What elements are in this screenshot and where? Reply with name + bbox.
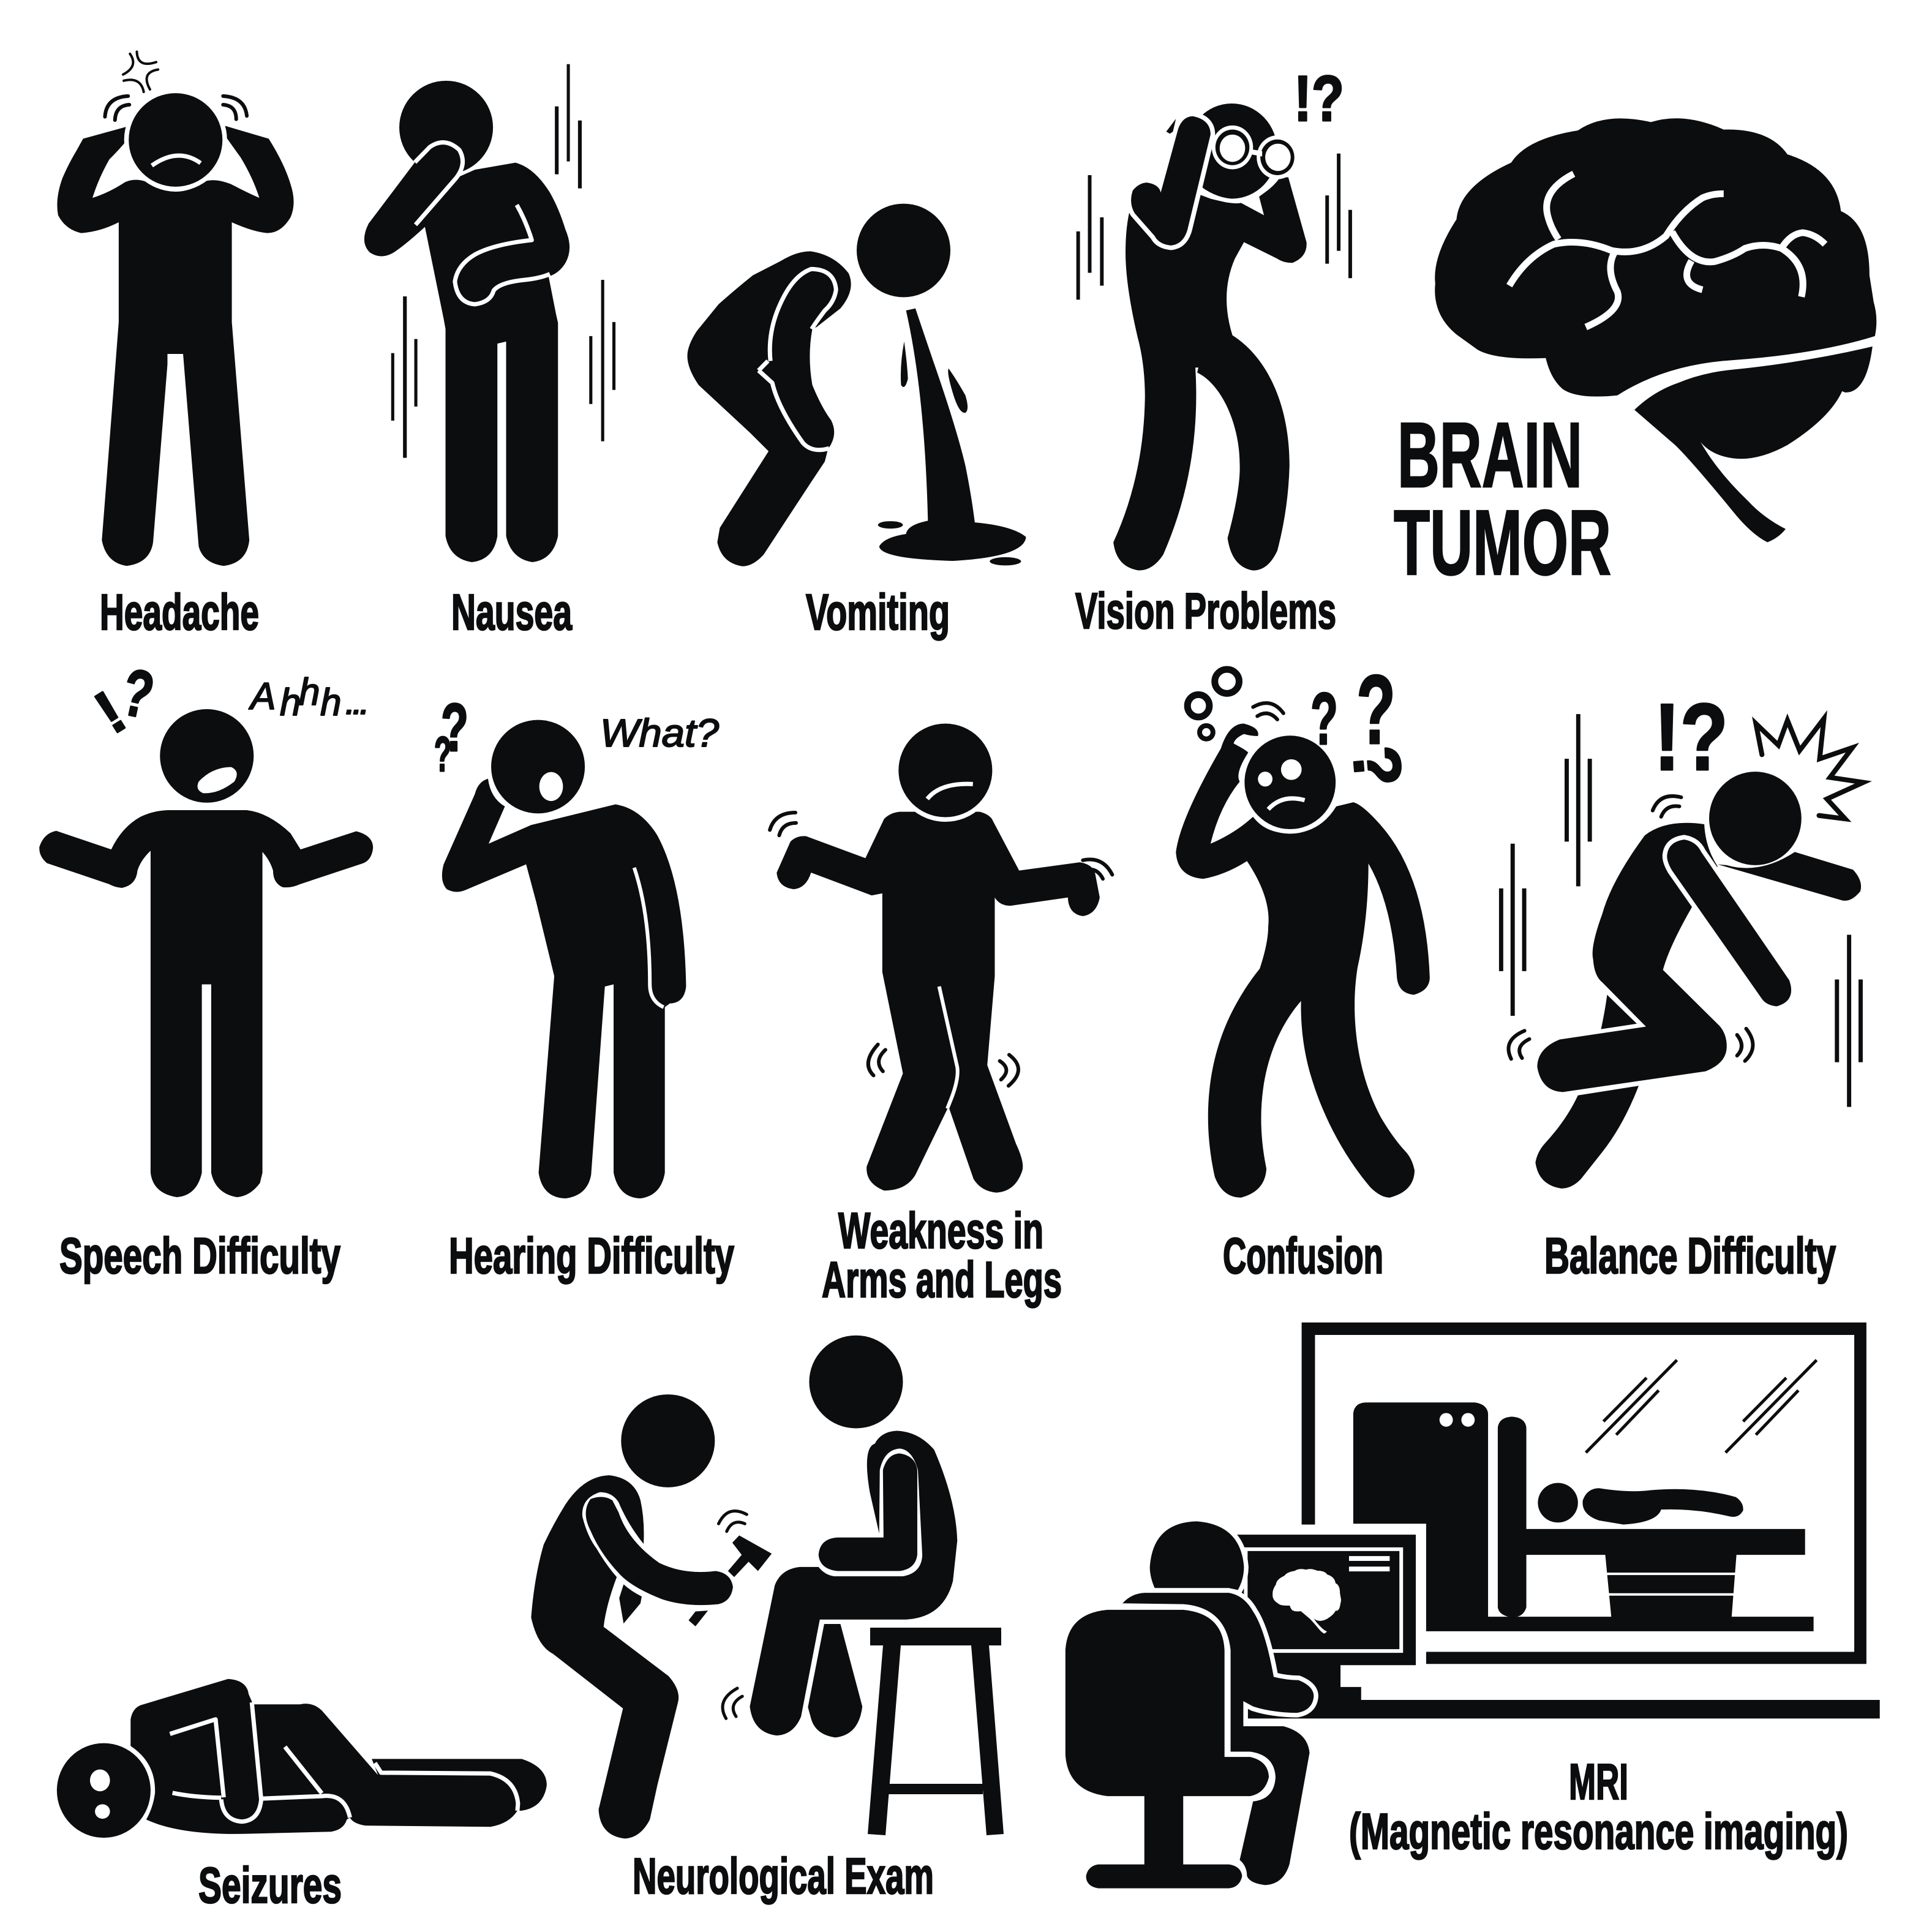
symbols: speech confusion (83, 654, 160, 746)
motion marks (718, 1511, 746, 1532)
brain folds (1509, 174, 1825, 327)
speech text: What?: What? (600, 711, 719, 755)
figure: confusion (1176, 669, 1430, 1198)
label: Seizures: Seizures (198, 1857, 342, 1914)
figure: nausea (364, 64, 615, 562)
head and neck arm (1709, 772, 1861, 901)
figure: vision problems (1077, 103, 1352, 571)
scene: MRI (1066, 1323, 1880, 1889)
motion marks (723, 1688, 742, 1718)
speech text: Ahhh: h (299, 671, 320, 713)
chin outline (1200, 176, 1279, 201)
symbols: question marks: ? (1310, 678, 1338, 760)
speech text: Ahhh: h (320, 682, 341, 724)
label: Hearing Difficulty: Hearing Difficulty (449, 1227, 734, 1284)
frown (927, 784, 973, 799)
frown (152, 156, 201, 165)
label: Vomiting: Vomiting (806, 584, 950, 641)
monitor and desk (1236, 1535, 1880, 1718)
arm outlines (415, 143, 463, 225)
figure: speech difficulty (39, 709, 373, 1197)
title: BRAIN (1397, 403, 1582, 506)
label: Confusion: Confusion (1223, 1227, 1383, 1284)
label: Neurological Exam: Neurological Exam (633, 1847, 934, 1904)
face (1258, 759, 1305, 810)
chair (1066, 1610, 1269, 1889)
symbols: question marks (1310, 655, 1416, 789)
stool (868, 1628, 1004, 1835)
title: TUMOR (1394, 491, 1611, 594)
vomit stream and pool (879, 309, 1026, 561)
technician (1122, 1521, 1314, 1885)
speech text: Ahhh: ... (346, 691, 367, 720)
scanner bed (1498, 1416, 1805, 1617)
brain scan image (1272, 1569, 1341, 1634)
reflex hammer (688, 1535, 772, 1626)
tie (619, 1584, 642, 1623)
symbols: exclamation question: !? (1294, 63, 1344, 135)
label: Vision Problems: Vision Problems (1075, 582, 1336, 639)
figure: headache (57, 51, 294, 566)
symbols: speech confusion: ? (116, 654, 160, 732)
speech text: Ahhh: h (280, 682, 301, 724)
arm (819, 1453, 917, 1571)
label: MRI: MRI (1569, 1753, 1628, 1810)
head (898, 724, 992, 817)
arm (1667, 840, 1791, 1006)
arm outline (634, 868, 664, 1007)
limb outlines (170, 1702, 518, 1822)
arm outline (759, 269, 836, 450)
tremor marks (1508, 796, 1753, 1061)
label: Speech Difficulty: Speech Difficulty (59, 1227, 340, 1284)
window glare (1586, 1360, 1817, 1453)
figure: balance difficulty (1499, 714, 1863, 1189)
tremor marks (770, 813, 1112, 1086)
figure: neurological exam patient (723, 1336, 957, 1737)
pain marks (1253, 703, 1284, 720)
symbols: question marks: ? (434, 727, 451, 781)
figure: neurological exam doctor (531, 1394, 772, 1838)
MRI scanner (1353, 1402, 1814, 1631)
second leg (808, 1624, 862, 1737)
arm (586, 1497, 733, 1605)
label: Weakness in Arms and Legs (822, 1202, 1062, 1308)
vibration bars (391, 64, 615, 458)
label: MRI (1349, 1753, 1848, 1860)
symbols: exclamation question: !? (1654, 684, 1728, 790)
window frame (1302, 1323, 1866, 1664)
thought circles (1187, 669, 1239, 739)
label: Headache: Headache (100, 584, 259, 641)
symbols: question marks: ? (1356, 655, 1396, 764)
symbols: question marks: ? (1339, 743, 1416, 789)
figure: weakness in arms and legs (770, 724, 1112, 1193)
raised arm (1131, 116, 1211, 246)
figure: vomiting (687, 204, 1026, 566)
head (129, 93, 222, 187)
head (1244, 735, 1336, 829)
pain marks (105, 51, 247, 120)
figure: seizures (57, 1679, 547, 1838)
illustration: brain (1435, 118, 1876, 543)
symbols: speech confusion: ! (83, 678, 137, 746)
symbols: question marks (434, 690, 468, 781)
label: Weakness in Arms and Legs: Arms and Legs (822, 1251, 1062, 1308)
vibration bars (1499, 714, 1863, 1107)
title (1394, 403, 1611, 594)
figure: hearing difficulty (442, 720, 686, 1198)
label: Nausea: Nausea (451, 584, 573, 641)
glasses (1212, 126, 1298, 179)
label: Weakness in Arms and Legs: Weakness in (838, 1202, 1043, 1259)
speech text: Ahhh (248, 671, 367, 724)
impact burst (1756, 719, 1863, 819)
patient lying down (1538, 1483, 1743, 1525)
symbols: question marks: ? (441, 690, 468, 765)
vibration bars (1077, 154, 1352, 299)
leg gap (939, 987, 958, 1108)
speech text: Ahhh: A (248, 675, 276, 718)
